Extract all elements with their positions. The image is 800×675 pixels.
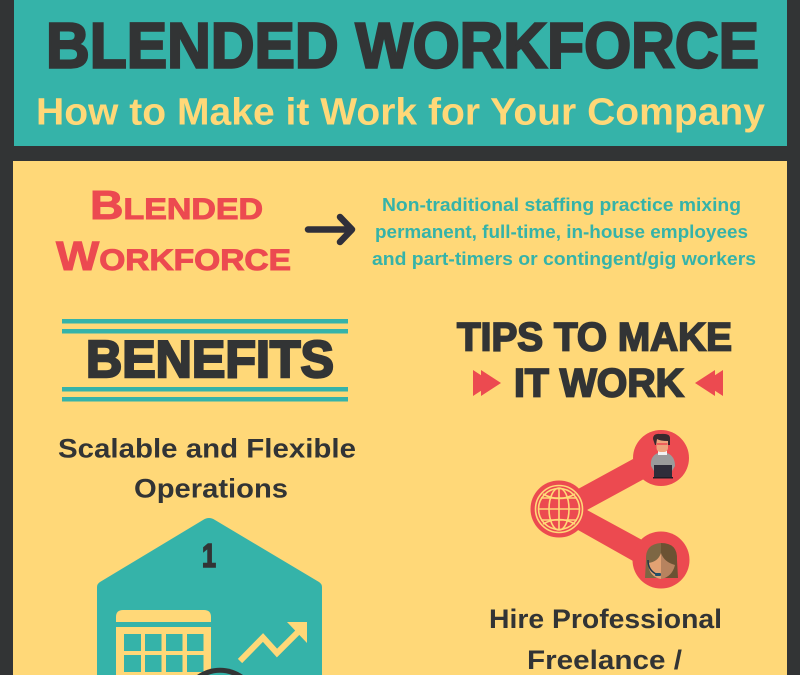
benefit title: Operations: [134, 474, 288, 504]
icon: freelancer with laptop: [633, 430, 689, 486]
benefit title: Scalable and Flexible: [58, 434, 356, 464]
tip title: Hire Professional: [489, 604, 722, 634]
icon: support agent with headset: [632, 532, 690, 588]
definition term: WORKFORCE: [56, 233, 291, 279]
benefit title: [58, 434, 356, 504]
subtitle: How to Make it Work for Your Company: [36, 92, 765, 134]
tip title: [489, 604, 722, 675]
header background: [14, 0, 787, 146]
tips heading: [457, 316, 732, 406]
icon: globe: [530, 480, 588, 538]
magnifier lens: [208, 673, 232, 675]
benefits heading: [62, 319, 348, 402]
tips heading: IT WORK: [514, 362, 684, 406]
badge number: 1: [202, 537, 216, 574]
definition term: [56, 182, 291, 279]
panel: main content: [13, 161, 787, 675]
tips heading: TIPS TO MAKE: [457, 316, 732, 360]
icon: magnifier: [197, 668, 243, 675]
definition text: permanent, full-time, in-house employees: [375, 221, 748, 242]
definition text: and part-timers or contingent/gig workers: [372, 248, 756, 269]
badge shape: [97, 518, 322, 675]
benefit badge 1: [97, 518, 322, 675]
definition text: Non-traditional staffing practice mixing: [382, 194, 741, 215]
connectors: [578, 459, 644, 561]
arrow: [308, 217, 352, 242]
main background: [13, 161, 787, 675]
network icon: [530, 430, 690, 588]
tip title: Freelance /: [527, 645, 683, 675]
panel: header: [14, 0, 787, 146]
icon: calendar: [116, 610, 211, 675]
benefits heading: BENEFITS: [86, 331, 334, 389]
definition text: [372, 194, 756, 269]
icon: growth arrow: [240, 622, 307, 661]
title: BLENDED WORKFORCE: [46, 10, 759, 82]
definition term: BLENDED: [90, 182, 263, 228]
